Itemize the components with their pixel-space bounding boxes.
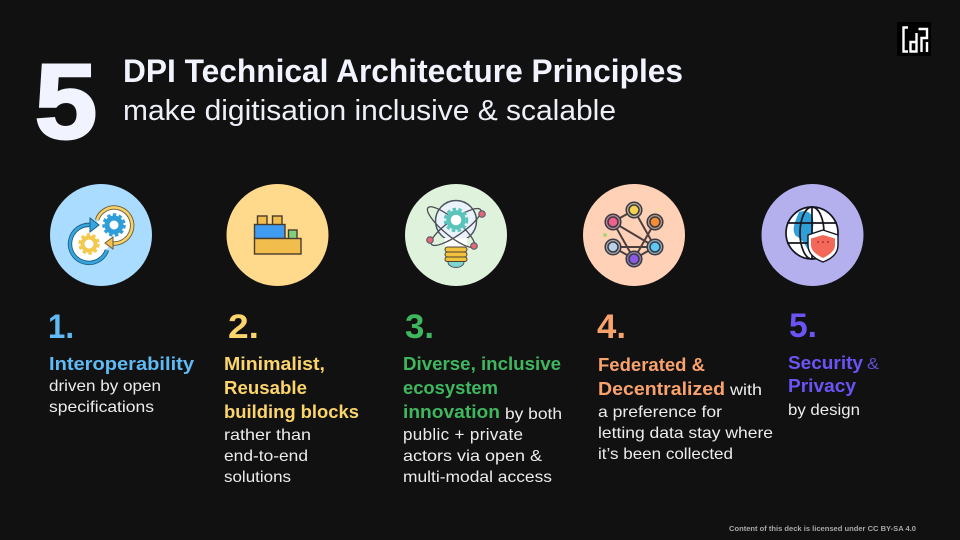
principle 3: 3. bbox=[405, 308, 434, 346]
principle 3: innovation bbox=[403, 401, 500, 422]
icon: interoperability gears bbox=[50, 184, 152, 286]
principle 3: multi-modal access bbox=[403, 469, 552, 486]
icon: building blocks bbox=[226, 184, 328, 286]
principle 3 bbox=[403, 308, 562, 486]
principle 4: it’s been collected bbox=[598, 446, 733, 463]
title: DPI Technical Architecture Principles bbox=[123, 53, 683, 89]
principle 2: solutions bbox=[224, 469, 291, 486]
principle 2: rather than bbox=[224, 427, 311, 444]
principle 3: actors via open & bbox=[403, 448, 542, 465]
principle 2: end-to-end bbox=[224, 448, 308, 465]
principle 2: 2. bbox=[228, 308, 259, 346]
principle 3: ecosystem bbox=[403, 377, 498, 398]
principle 3: Diverse, inclusive bbox=[403, 353, 561, 374]
principle 5 bbox=[788, 307, 879, 419]
principle 4: letting data stay where bbox=[598, 425, 773, 442]
principle 4: Federated & bbox=[598, 354, 705, 375]
icon: light bulb innovation bbox=[405, 184, 507, 286]
big numeral 5: 5 bbox=[35, 43, 97, 161]
principle 5: Privacy bbox=[788, 375, 857, 396]
title: make digitisation inclusive & scalable bbox=[123, 95, 616, 127]
principle 3: by both bbox=[505, 406, 562, 423]
licence footer: Content of this deck is licensed under CC BY-SA 4.0 bbox=[729, 524, 916, 533]
principle 5: Security bbox=[788, 352, 864, 373]
principle 4: Decentralized bbox=[598, 378, 725, 399]
principle 5: & bbox=[867, 356, 879, 373]
principle 4: with bbox=[729, 382, 762, 399]
principle 1: 1. bbox=[48, 308, 74, 346]
principle 3: public + private bbox=[403, 425, 523, 444]
principle 5: 5. bbox=[789, 307, 817, 345]
icon: federated network bbox=[583, 184, 685, 286]
principle 2: Minimalist, bbox=[224, 353, 325, 374]
principle 4: 4. bbox=[597, 308, 626, 346]
principle 1: Interoperability bbox=[49, 353, 195, 374]
principle 1 bbox=[48, 308, 195, 416]
principle 4 bbox=[597, 308, 773, 463]
principle 1: driven by open bbox=[49, 378, 161, 395]
logo bbox=[897, 22, 931, 56]
principle 2: building blocks bbox=[224, 401, 359, 422]
icon: secure globe bbox=[762, 184, 864, 286]
principle 1: specifications bbox=[49, 399, 154, 416]
principle 5: by design bbox=[788, 402, 860, 419]
principle 4: a preference for bbox=[598, 404, 723, 421]
title bbox=[123, 53, 683, 127]
principle 2 bbox=[224, 308, 359, 486]
principle 2: Reusable bbox=[224, 377, 307, 398]
